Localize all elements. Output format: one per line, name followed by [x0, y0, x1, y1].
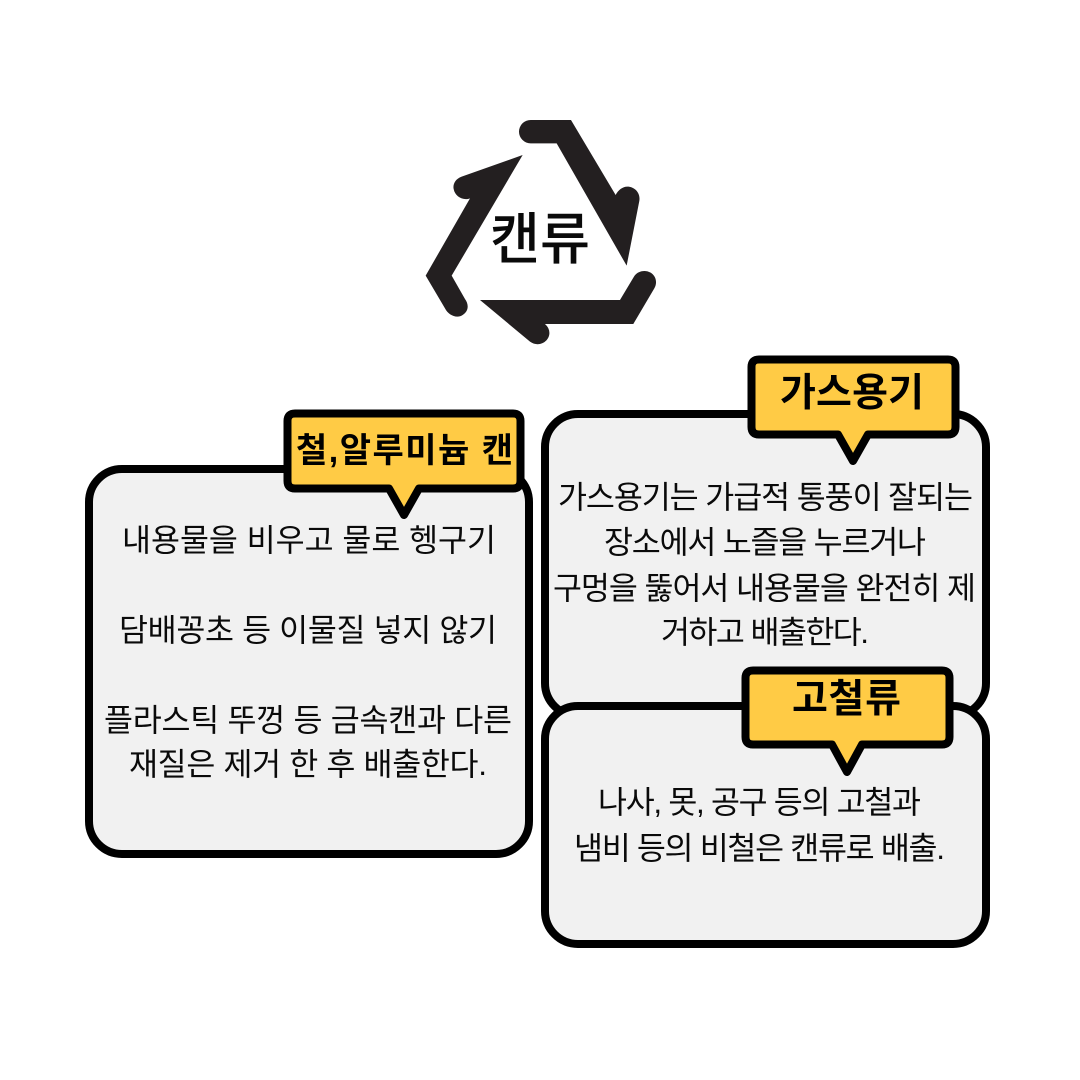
- panel: scrap metal: [545, 706, 986, 944]
- icon: recycling triangle arrows: [426, 120, 656, 344]
- text: gas container instructions: 구멍을 뚫어서 내용물을 완전히 제: [553, 570, 976, 606]
- callout: metal and aluminium cans: 철,알루미늄 캔: [296, 432, 513, 470]
- panel: metal and aluminium cans: [89, 469, 529, 854]
- text: can instructions: 담배꽁초 등 이물질 넣지 않기: [119, 612, 497, 648]
- text: scrap metal instructions: 나사, 못, 공구 등의 고철과: [598, 784, 921, 820]
- text: gas container instructions: 장소에서 노즐을 누르거나: [604, 524, 926, 560]
- panel: gas containers: [545, 414, 986, 716]
- callout: scrap metal: 고철류: [792, 678, 901, 721]
- text: gas container instructions: [553, 479, 976, 650]
- text: gas container instructions: 가스용기는 가급적 통풍이 잘되는: [558, 479, 973, 515]
- text: can instructions: 재질은 제거 한 후 배출한다.: [129, 746, 487, 782]
- callout: gas containers: 가스용기: [780, 372, 924, 415]
- callout: scrap metal: [746, 670, 950, 772]
- text: gas container instructions: 거하고 배출한다.: [661, 614, 869, 650]
- text: scrap metal instructions: 냄비 등의 비철은 캔류로 배출.: [574, 830, 945, 866]
- text: can instructions: [104, 522, 512, 782]
- text: can instructions: 내용물을 비우고 물로 헹구기: [122, 522, 496, 558]
- text: scrap metal instructions: [574, 784, 945, 866]
- callout: metal and aluminium cans: [288, 414, 520, 515]
- callout: gas containers: [752, 360, 956, 461]
- text: can instructions: 플라스틱 뚜껑 등 금속캔과 다른: [104, 702, 512, 738]
- title: 캔류: [490, 208, 590, 271]
